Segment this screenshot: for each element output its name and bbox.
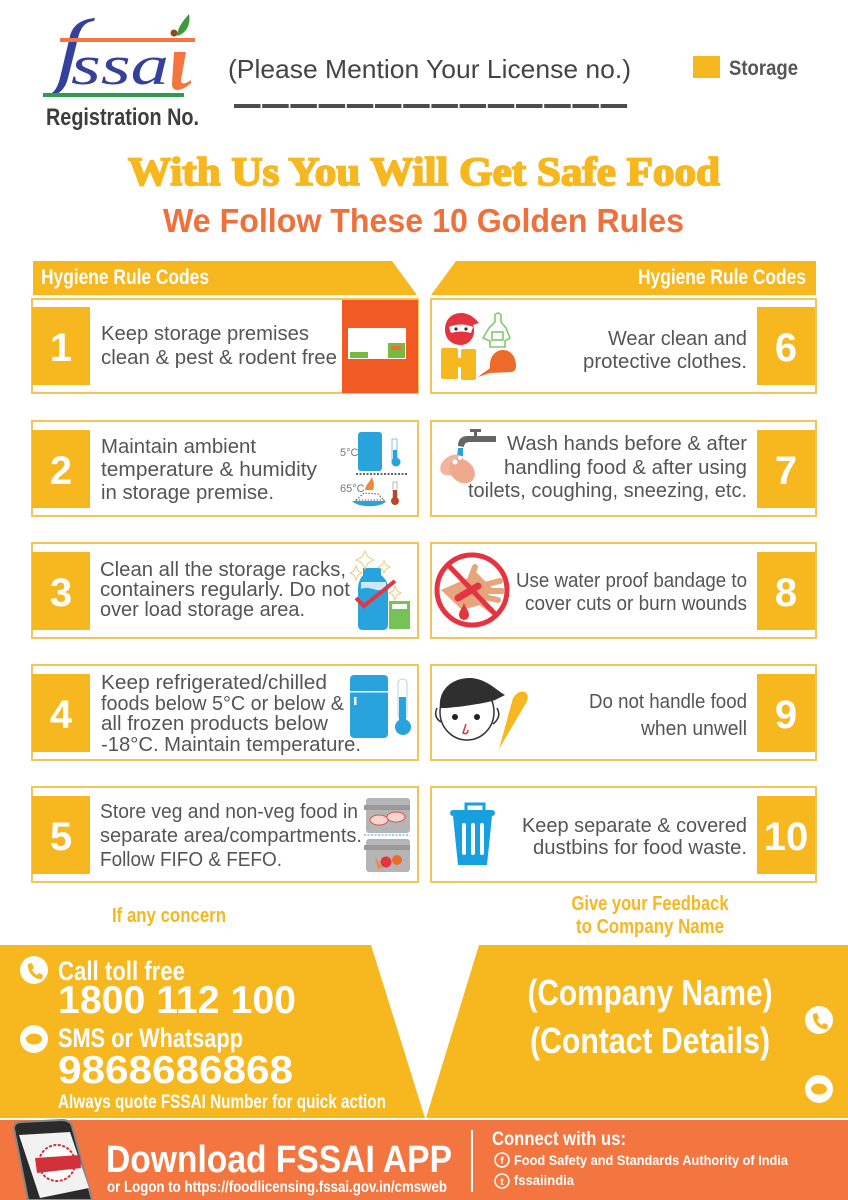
panel: rule 7: toilets, coughing, sneezing, etc.	[468, 480, 747, 502]
panel: rule 8	[431, 543, 816, 638]
icon: temperature fridge and hot food: 65°C	[340, 483, 365, 495]
panel: rule 8: Use water proof bandage to	[516, 570, 747, 592]
caption: feedback: Give your Feedback	[572, 893, 729, 915]
panel: rule 2	[32, 421, 418, 516]
panel: toll free contact: Always quote FSSAI Number for quick action	[58, 1092, 386, 1113]
panel: rule 3: Clean all the storage racks,	[100, 559, 346, 581]
license number prompt: (Please Mention Your License no.)	[228, 54, 631, 84]
panel: rule 3: over load storage area.	[100, 599, 305, 621]
panel: rule 4: foods below 5°C or below &	[101, 693, 345, 715]
icon: phone	[20, 956, 48, 984]
header band: right	[431, 261, 816, 295]
panel: rule 7	[431, 421, 816, 516]
panel: company contact: (Company Name)	[528, 972, 772, 1013]
panel: rule 6: protective clothes.	[583, 351, 747, 373]
icon: sick face and thermometer	[436, 678, 528, 749]
icon: twitter: t	[500, 1177, 504, 1188]
icon: washing hands under tap	[436, 429, 496, 488]
logo: fssai registration: ssa	[71, 35, 169, 97]
panel: rule 7: handling food & after using	[504, 457, 747, 479]
icon: temperature fridge and hot food: 5°C	[340, 447, 359, 459]
panel: rule 3: 3	[50, 571, 72, 615]
panel: rule 6	[431, 299, 816, 393]
footer band: Download FSSAI APP	[106, 1139, 452, 1181]
footer band	[0, 1120, 848, 1200]
icon: clean bottle and glass	[350, 551, 410, 630]
panel: rule 4: all frozen products below	[101, 713, 329, 735]
legend: storage	[693, 56, 798, 80]
footer band: Food Safety and Standards Authority of India	[514, 1152, 788, 1168]
icon: temperature fridge and hot food	[340, 432, 408, 506]
icon: phone	[805, 1006, 833, 1034]
panel: rule 5: Follow FIFO & FEFO.	[100, 849, 282, 871]
panel: rule 2: Maintain ambient	[101, 436, 256, 458]
panel: rule 1: 1	[50, 326, 72, 370]
panel: rule 7: Wash hands before & after	[507, 433, 747, 455]
header band: left: Hygiene Rule Codes	[41, 266, 209, 289]
icon: twitter	[495, 1174, 509, 1188]
panel: toll free contact: SMS or Whatsapp	[58, 1023, 243, 1053]
panel: rule 9: when unwell	[640, 718, 747, 740]
footer band: Connect with us:	[492, 1129, 626, 1150]
panel: rule 5: 5	[50, 815, 72, 859]
panel: rule 10: Keep separate & covered	[522, 815, 747, 837]
panel: rule 5: Store veg and non-veg food in	[100, 801, 358, 823]
icon: storage room	[342, 300, 418, 393]
caption: feedback	[572, 893, 729, 938]
panel: toll free contact: 1800 112 100	[58, 979, 296, 1022]
panel: rule 2: in storage premise.	[101, 482, 274, 504]
icon: facebook: f	[500, 1156, 504, 1167]
panel: rule 9	[431, 665, 816, 760]
header band: left	[33, 261, 417, 295]
icon: no open wounds sign	[437, 555, 507, 625]
icon: fridge and thermometer	[350, 675, 411, 738]
panel: rule 3	[32, 543, 418, 638]
panel: rule 6: Wear clean and	[608, 328, 747, 350]
panel: toll free contact	[0, 945, 425, 1118]
panel: rule 5	[32, 787, 418, 882]
panel: rule 4: 4	[50, 693, 73, 737]
panel: rule 2: temperature & humidity	[101, 459, 317, 481]
panel: rule 4: Keep refrigerated/chilled	[101, 672, 327, 694]
panel: rule 7: 7	[775, 449, 797, 493]
icon: facebook	[495, 1153, 509, 1167]
panel: rule 2: 2	[50, 449, 72, 493]
panel: toll free contact: 9868686868	[58, 1049, 293, 1092]
icon: message	[805, 1075, 833, 1103]
panel: rule 9: 9	[775, 693, 797, 737]
panel: rule 5: separate area/compartments.	[100, 825, 362, 847]
icon: dustbin	[450, 804, 495, 865]
panel: rule 1: Keep storage premises	[101, 323, 309, 345]
panel: rule 8: 8	[775, 571, 797, 615]
panel: toll free contact: Call toll free	[58, 956, 185, 986]
panel: rule 6: 6	[775, 326, 797, 370]
subtitle: We Follow These 10 Golden Rules	[163, 202, 684, 239]
title: With Us You Will Get Safe Food	[128, 149, 720, 194]
panel: rule 1: clean & pest & rodent free	[101, 347, 337, 369]
panel: rule 10	[431, 787, 816, 882]
header band: right: Hygiene Rule Codes	[638, 266, 806, 289]
footer band: or Logon to https://foodlicensing.fssai.gov.in/cmsweb	[107, 1179, 447, 1196]
panel: rule 4	[32, 665, 418, 760]
caption: feedback: to Company Name	[576, 916, 724, 938]
panel: rule 3: containers regularly. Do not	[100, 579, 350, 601]
panel: rule 1	[32, 299, 418, 393]
panel: rule 10: 10	[764, 815, 808, 859]
icon: separated food containers	[364, 798, 410, 872]
panel: rule 9: Do not handle food	[589, 691, 747, 713]
panel: rule 10: dustbins for food waste.	[533, 837, 747, 859]
logo: fssai registration	[43, 14, 199, 131]
icon: protective clothing	[441, 313, 516, 380]
icon: message	[20, 1025, 48, 1053]
panel: company contact: (Contact Details)	[530, 1020, 770, 1061]
legend: storage: Storage	[729, 57, 798, 80]
icon: phone with fssai seal	[14, 1120, 92, 1200]
panel: rule 4: -18°C. Maintain temperature.	[101, 734, 361, 756]
footer band: fssaiindia	[514, 1172, 574, 1188]
panel: rule 8: cover cuts or burn wounds	[525, 593, 747, 615]
logo: fssai registration: Registration No.	[46, 104, 199, 131]
panel: company contact	[426, 945, 848, 1118]
caption: if any concern: If any concern	[112, 905, 226, 927]
